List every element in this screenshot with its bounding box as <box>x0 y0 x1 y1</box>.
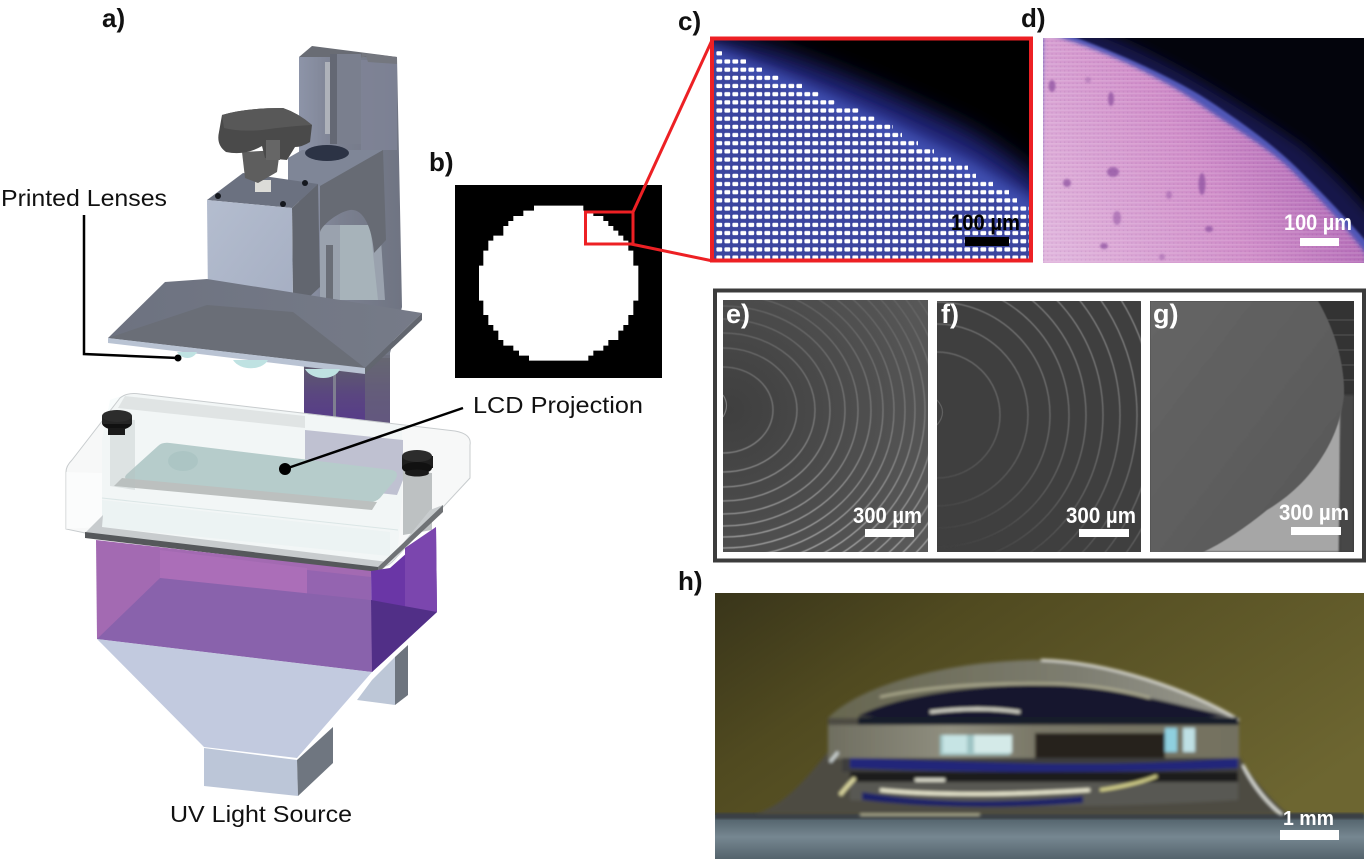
cube: carriage block <box>207 173 320 312</box>
heading: b): b) <box>429 147 454 177</box>
panel b: LCD pixel mask <box>455 185 662 378</box>
heading: h): h) <box>678 566 703 596</box>
lens body <box>755 660 1288 815</box>
icon: right screw <box>402 450 433 476</box>
scale bar: 300 µm <box>853 503 922 528</box>
panel a: 3D printer render <box>1 46 643 827</box>
label e: e) <box>726 299 750 329</box>
scale bar: 300 µm <box>1066 503 1136 528</box>
callout: Printed Lenses: Printed Lenses <box>1 185 167 211</box>
hopper: light source body <box>97 639 372 796</box>
heading: d): d) <box>1021 3 1046 33</box>
panel c: micrograph of pixels <box>710 36 1033 262</box>
scale bar: 1 mm <box>1283 808 1334 830</box>
panel d: printed pixel micrograph <box>1043 38 1364 263</box>
scale bar: 100 µm <box>951 210 1020 235</box>
label f: f) <box>941 299 959 329</box>
back leg <box>357 645 408 705</box>
icon: left screw <box>102 410 132 435</box>
panel e: SEM rings <box>723 300 928 552</box>
panel frame: e-g SEM group <box>715 290 1364 560</box>
icon: clamping knob <box>218 108 312 192</box>
arm: carriage bracket <box>288 145 386 253</box>
lenses: printed lenses under plate <box>177 352 340 378</box>
scale bar <box>1066 503 1136 537</box>
scale bar <box>1284 210 1352 246</box>
glass cover <box>66 394 470 567</box>
scale bar <box>951 210 1020 246</box>
callout: LCD Projection: LCD Projection <box>473 392 643 418</box>
panel f: SEM rings faint <box>937 301 1141 552</box>
callout: Printed Lenses <box>1 185 182 362</box>
build plate <box>108 279 422 374</box>
zoom indicator: red box and connectors <box>586 38 713 261</box>
label: UV Light Source: UV Light Source <box>170 801 352 827</box>
scale bar <box>853 503 922 537</box>
heading: c): c) <box>678 6 701 36</box>
label g: g) <box>1153 299 1178 329</box>
panel h: lens photograph <box>715 593 1364 859</box>
scale bar: 100 µm <box>1284 210 1352 235</box>
scale bar <box>1280 808 1339 840</box>
tank: resin vat <box>102 395 403 566</box>
scale bar <box>1279 500 1349 535</box>
heading: a): a) <box>102 3 125 33</box>
panel g: SEM smooth lens <box>1150 299 1354 555</box>
UV light box: purple beam <box>96 527 437 672</box>
column: vertical rail <box>299 46 402 440</box>
callout: LCD Projection <box>279 392 643 475</box>
white pixelated circle <box>479 206 638 361</box>
scale bar: 300 µm <box>1279 500 1349 525</box>
metal base plate <box>85 505 443 573</box>
